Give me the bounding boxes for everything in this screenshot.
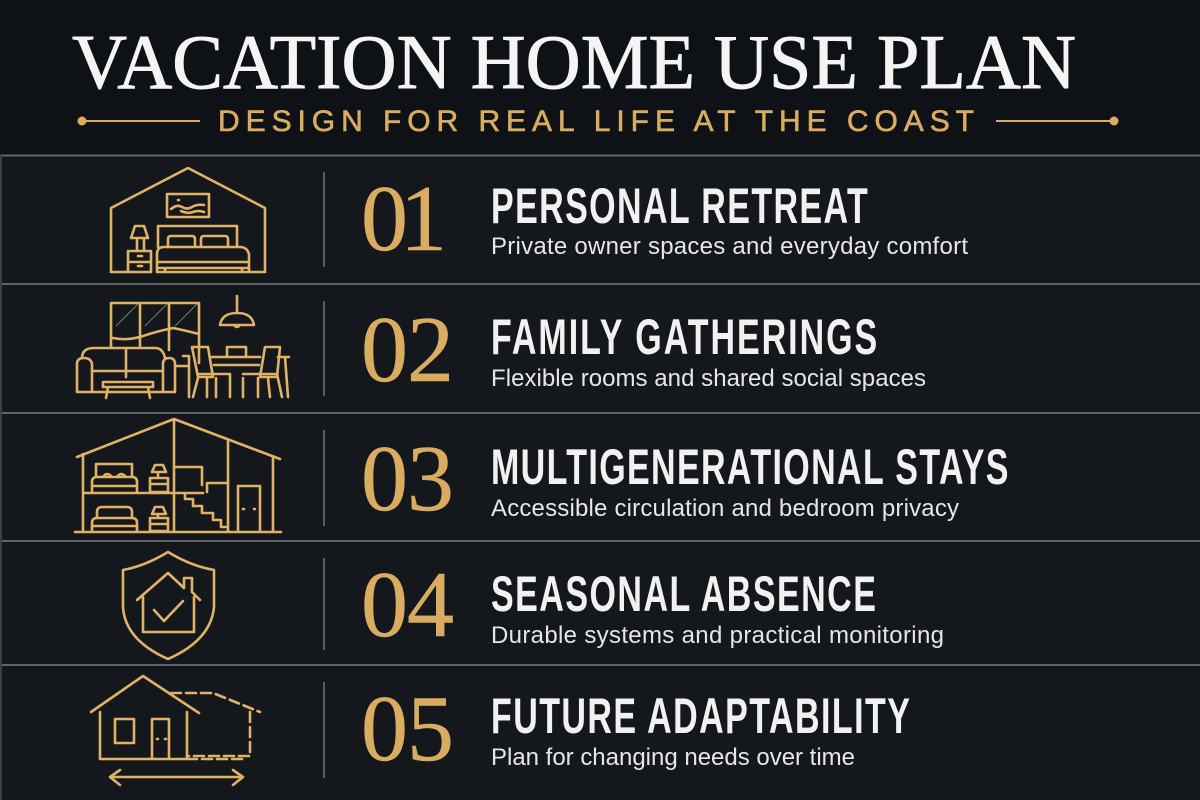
panel: future adaptability (91, 676, 910, 785)
heading: FAMILY GATHERINGS (491, 310, 877, 366)
number 01: 01 (361, 167, 446, 271)
number 04: 04 (361, 553, 453, 657)
description: Flexible rooms and shared social spaces (491, 365, 926, 392)
icon: house with bedroom (111, 168, 265, 272)
panel: multigenerational stays (75, 419, 1008, 532)
icon: house with dashed extension and arrow (91, 676, 260, 785)
description: Accessible circulation and bedroom privacy (491, 495, 959, 522)
number 03: 03 (361, 427, 453, 531)
subtitle: DESIGN FOR REAL LIFE AT THE COAST (218, 105, 974, 138)
heading: SEASONAL ABSENCE (491, 567, 876, 623)
panel: personal retreat (111, 167, 968, 272)
number 02: 02 (361, 298, 453, 402)
heading: PERSONAL RETREAT (491, 179, 868, 235)
number 05: 05 (361, 677, 453, 781)
icon: shield with house and check (123, 552, 214, 659)
icon: house cross-section (75, 419, 281, 532)
icon: living and dining room (77, 296, 289, 398)
description: Plan for changing needs over time (491, 744, 855, 771)
title: VACATION HOME USE PLAN (72, 19, 1076, 105)
heading: FUTURE ADAPTABILITY (491, 689, 910, 745)
description: Private owner spaces and everyday comfort (491, 233, 968, 260)
panel: seasonal absence (123, 552, 944, 659)
heading: MULTIGENERATIONAL STAYS (491, 440, 1008, 496)
panel: family gatherings (77, 296, 926, 402)
description: Durable systems and practical monitoring (491, 622, 944, 649)
